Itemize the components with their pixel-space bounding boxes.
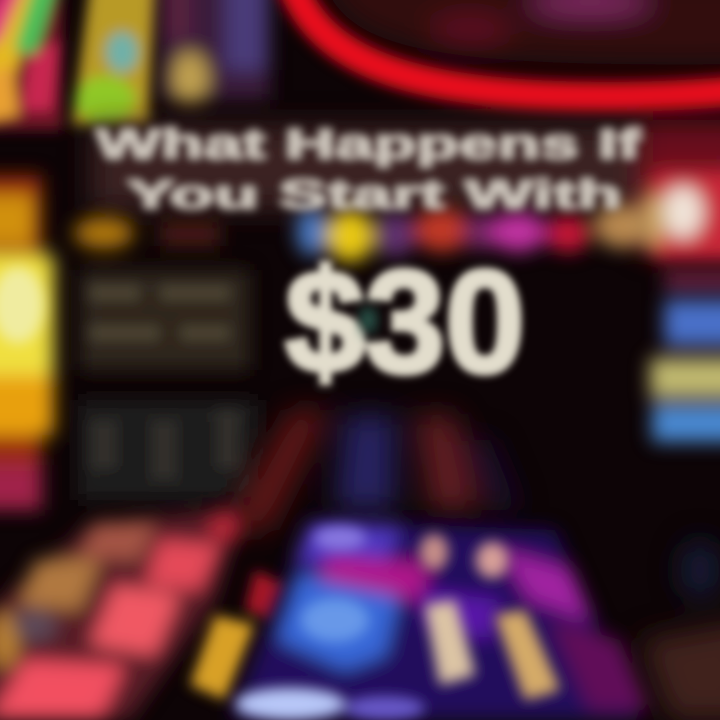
right white and red sign xyxy=(638,170,720,260)
heading: You Start With xyxy=(126,173,622,217)
floor highlights xyxy=(235,526,560,720)
top yellow-green machine xyxy=(72,0,158,125)
teal accent on price xyxy=(359,306,377,334)
red right side xyxy=(90,120,720,250)
colourful strip beneath heading xyxy=(296,204,650,262)
heading: What Happens If xyxy=(96,120,642,167)
yellow floor tile xyxy=(190,570,285,700)
top purple machine xyxy=(160,0,270,104)
top left slot machine lights xyxy=(0,0,62,130)
carpet aisle stripes xyxy=(225,410,520,530)
dim screen text xyxy=(90,285,240,480)
right blue and yellow screens xyxy=(650,272,720,442)
dim screen block xyxy=(74,217,258,500)
left yellow machine xyxy=(0,175,54,510)
left highlight xyxy=(0,267,44,343)
price value: $30 xyxy=(285,240,525,403)
roulette interior xyxy=(320,0,720,65)
left floor tiles xyxy=(0,505,245,720)
red neon arc xyxy=(288,0,720,97)
centre floor panel xyxy=(230,520,650,720)
heading xyxy=(96,120,642,217)
bottom right floor xyxy=(640,540,720,720)
